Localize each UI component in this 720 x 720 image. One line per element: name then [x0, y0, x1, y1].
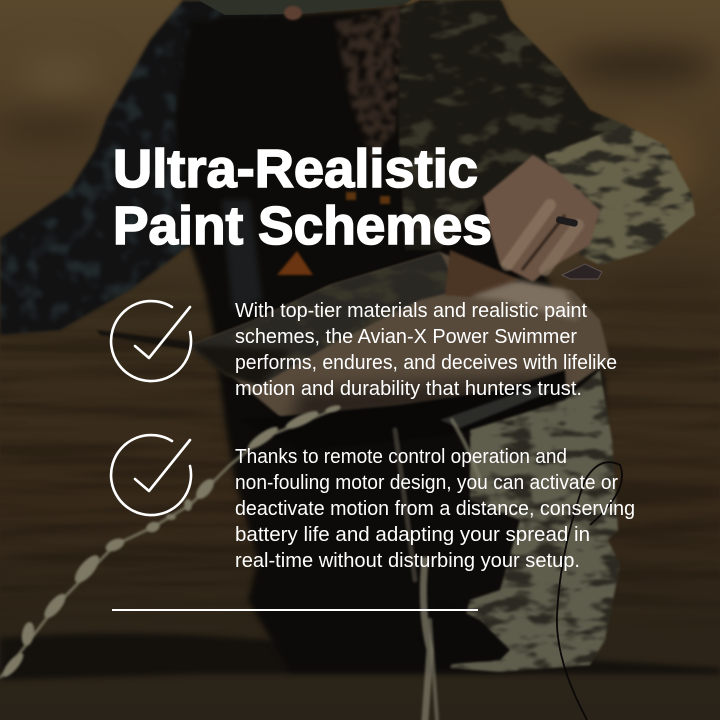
text block: paint schemes: schemes, the Avian-X Power Swimmer [235, 326, 577, 348]
torso [175, 0, 605, 672]
hat [198, 0, 412, 15]
blurred shoreline [0, 49, 720, 330]
text block: remote control: battery life and adapting your spread in [235, 524, 590, 546]
title [113, 139, 492, 256]
left arm [0, 0, 300, 335]
icon: check circle 1 [111, 301, 191, 381]
dark water band [0, 633, 720, 680]
water drips [395, 420, 480, 720]
text block: remote control: Thanks to remote control operation and [235, 446, 567, 468]
text block: paint schemes: performs, endures, and deceives with lifelike [235, 352, 617, 374]
divider line [112, 609, 478, 611]
sleeve [398, 0, 640, 250]
wire [557, 462, 622, 720]
decoy body [190, 252, 610, 425]
text block: paint schemes: With top-tier materials and realistic paint [235, 300, 587, 322]
decoy keel [240, 370, 566, 450]
cuff [545, 125, 695, 265]
beard [335, 5, 405, 160]
text block: remote control: deactivate motion from a distance, conserving [235, 498, 635, 520]
text block: paint schemes [235, 300, 617, 400]
nose [284, 6, 302, 20]
icon: check circle 2 [111, 435, 191, 515]
water splash [0, 404, 342, 680]
title: Ultra-Realistic [113, 139, 478, 199]
hand [483, 155, 600, 282]
text block: remote control [235, 446, 635, 572]
chest detail [222, 200, 262, 310]
text block: paint schemes: motion and durability that hunters trust. [235, 378, 582, 400]
title: Paint Schemes [113, 196, 492, 256]
text block: remote control: real-time without disturbing your setup. [235, 550, 580, 572]
water ripples [0, 336, 720, 575]
text block: remote control: non-fouling motor design, you can activate or [235, 472, 618, 494]
wader camo [450, 370, 620, 672]
